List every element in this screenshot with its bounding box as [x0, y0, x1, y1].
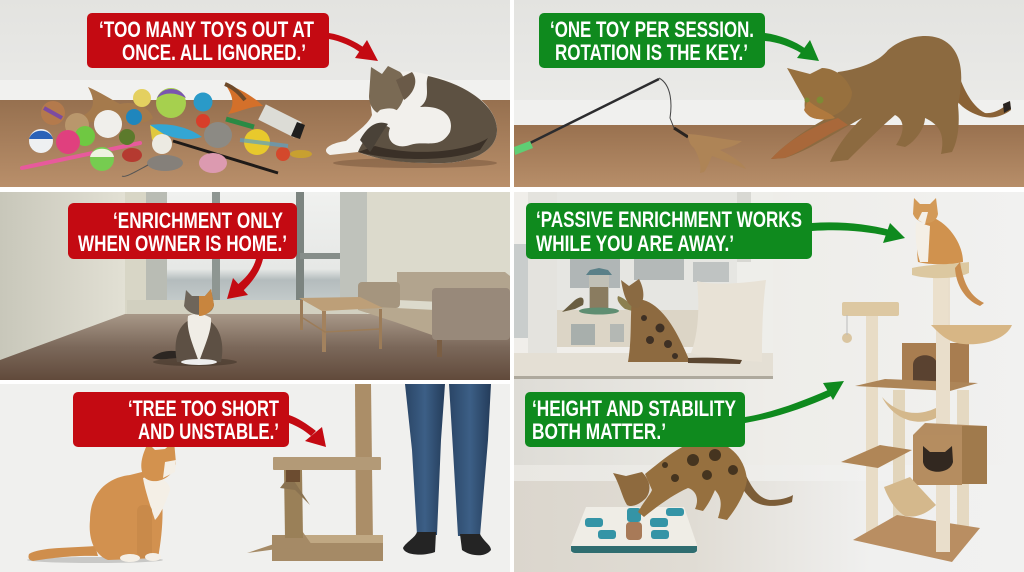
arrow: toys callout to cat: [329, 33, 378, 61]
sofa: [358, 272, 510, 357]
callout: passive enrichment: [526, 203, 812, 259]
tall cat tree: [841, 262, 1012, 562]
arrow: short tree callout to tree: [289, 415, 326, 447]
arrow: home callout to cat: [227, 259, 263, 299]
callout: too many toys: ‘TOO MANY TOYS OUT AT: [99, 17, 314, 42]
arrow: passive callout to top cat: [812, 222, 905, 243]
cat: orange on top of tree: [913, 198, 984, 306]
panel: tree too short: [0, 384, 510, 572]
callout: too many toys: [87, 13, 329, 68]
callout: height and stability: BOTH MATTER.’: [532, 419, 666, 444]
cat: bengal at window: [621, 279, 742, 364]
panel: one toy per session: [514, 0, 1024, 187]
arrow: session callout to cat: [765, 33, 819, 61]
cushion: [691, 280, 766, 362]
callout: tree too short: AND UNSTABLE.’: [138, 419, 279, 444]
callout: height and stability: [525, 392, 745, 447]
cat: bengal at puzzle: [613, 440, 793, 520]
callout: tree too short: ‘TREE TOO SHORT: [128, 396, 279, 421]
window with feeder: [514, 192, 773, 379]
callout: passive enrichment: WHILE YOU ARE AWAY.’: [536, 231, 734, 256]
panel: enrichment only when home: [0, 192, 510, 380]
cat: calico sitting: [152, 289, 237, 366]
callout: height and stability: ‘HEIGHT AND STABILITY: [532, 396, 736, 421]
callout: too many toys: ONCE. ALL IGNORED.’: [122, 40, 306, 65]
cat: sleeping tabby: [326, 66, 497, 168]
panel: passive enrichment and height: [514, 192, 1024, 572]
callout: passive enrichment: ‘PASSIVE ENRICHMENT WORKS: [536, 207, 802, 232]
callout: enrichment only when home: WHEN OWNER IS HOME.’: [78, 231, 287, 256]
puzzle feeder: [571, 507, 697, 553]
cat: abyssinian playing: [771, 36, 1011, 162]
cat: orange tabby: [27, 441, 176, 563]
panel: too many toys: [0, 0, 510, 187]
callout: one toy per session: ‘ONE TOY PER SESSION.: [550, 17, 754, 42]
callout: one toy per session: [539, 13, 765, 68]
callout: enrichment only when home: ‘ENRICHMENT ONLY: [113, 208, 283, 233]
wand toy: [514, 78, 746, 173]
arrow: height callout to tree: [745, 381, 844, 423]
callout: tree too short: [73, 392, 289, 447]
short scratching tree: [247, 384, 383, 561]
callout: one toy per session: ROTATION IS THE KEY.’: [555, 40, 748, 65]
callout: enrichment only when home: [68, 203, 297, 259]
toy pile: [22, 84, 312, 176]
person legs: [403, 384, 491, 555]
coffee table: [299, 297, 383, 352]
